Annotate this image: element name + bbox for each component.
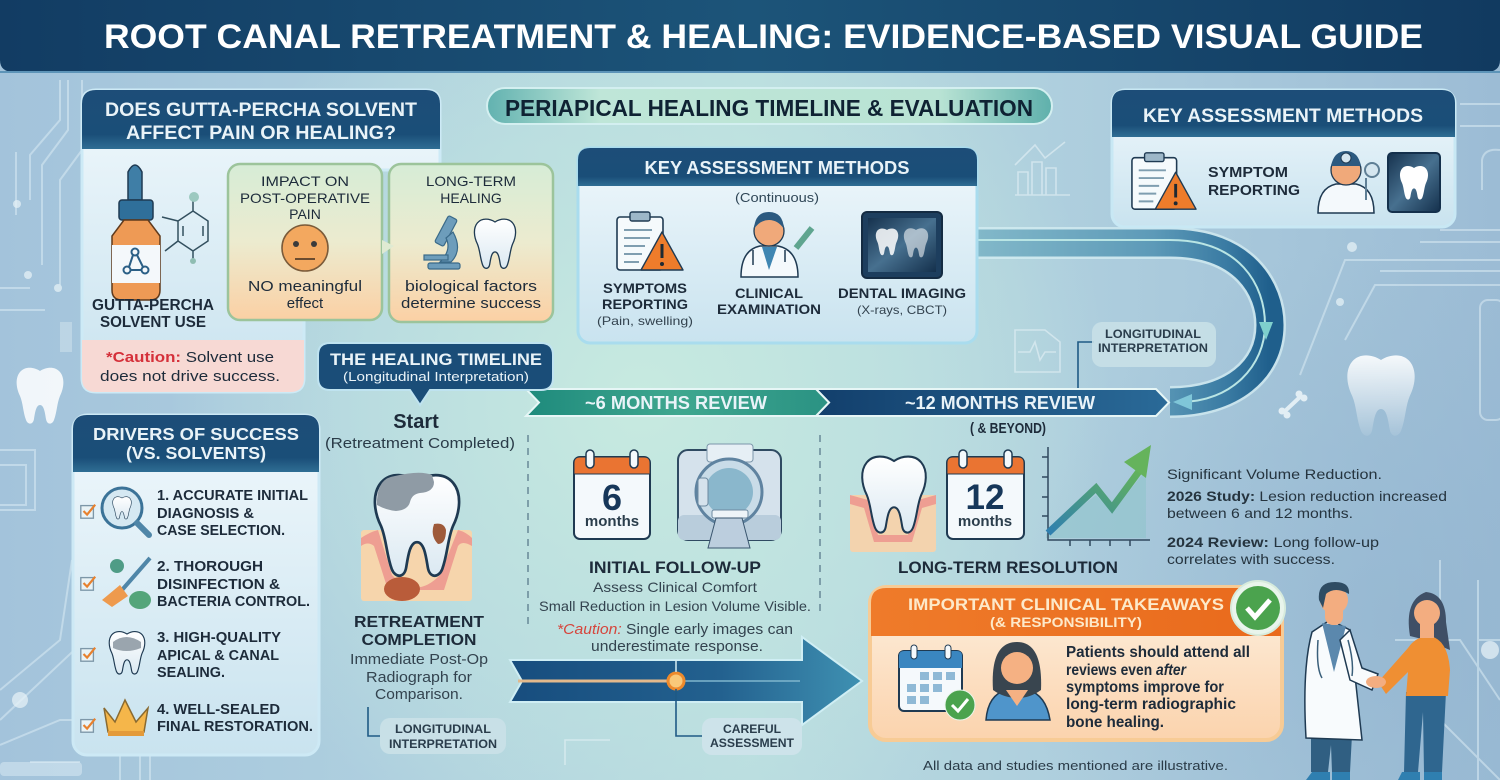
callout: the healing timeline — [318, 343, 553, 405]
text: initial follow-up: Assess Clinical Comfort — [593, 579, 757, 595]
note: illustrative data disclaimer: All data and studies mentioned are illustrative. — [923, 758, 1228, 773]
panel: key assessment methods (top right): REPORTING — [1208, 183, 1300, 199]
icon: 12 month calendar: 12 — [966, 478, 1004, 517]
text: long-term resolution: LONG-TERM RESOLUTION — [898, 559, 1118, 577]
panel heading: AFFECT PAIN OR HEALING? — [126, 123, 396, 144]
driver 4: final restoration: 4. WELL-SEALED — [157, 702, 280, 718]
icon: dentist — [1318, 151, 1379, 213]
patient figure — [1366, 592, 1450, 780]
labels: assessment methods: REPORTING — [602, 296, 688, 312]
label: solvent use — [92, 297, 214, 331]
icon: 6 month calendar: 6 — [602, 477, 622, 518]
panel: key assessment methods (continuous): (Continuous) — [735, 190, 819, 205]
icon: retreated tooth in gum — [361, 473, 472, 601]
title banner — [0, 0, 1500, 72]
card: post-operative pain impact: effect — [287, 295, 324, 312]
driver 1: diagnosis — [81, 488, 308, 539]
label: longitudinal interpretation (lower): INTERPRETATION — [389, 737, 497, 751]
icon: dental imaging — [862, 212, 942, 278]
icon: solvent bottle and molecule — [112, 165, 208, 300]
text: initial follow-up: Small Reduction in Lesion Volume Visible. — [539, 598, 811, 614]
driver 3: sealing — [81, 630, 281, 681]
panel heading — [105, 100, 417, 144]
label: solvent use: SOLVENT USE — [100, 314, 206, 331]
text: start: Start — [393, 411, 439, 433]
labels: assessment methods: SYMPTOMS — [603, 280, 687, 296]
card: long-term healing: LONG-TERM — [426, 173, 516, 189]
band: 6 months: ~6 MONTHS REVIEW — [585, 393, 767, 413]
labels: assessment methods: EXAMINATION — [717, 301, 821, 317]
heading: periapical timeline: PERIAPICAL HEALING TIMELINE & EVALUATION — [505, 95, 1033, 121]
driver 2: disinfection: 2. THOROUGH — [157, 559, 263, 575]
band: 12 months: ~12 MONTHS REVIEW — [905, 393, 1095, 413]
text: retreatment completion: Immediate Post-Op — [350, 652, 488, 668]
icon: CBCT scanner — [678, 444, 781, 548]
panel heading: (VS. SOLVENTS) — [126, 443, 266, 463]
text: retreatment completion: RETREATMENT — [354, 614, 485, 631]
driver 2: disinfection: DISINFECTION & — [157, 577, 281, 593]
driver 4: final restoration: FINAL RESTORATION. — [157, 719, 313, 735]
panel: key assessment methods (continuous): KEY ASSESSMENT METHODS — [644, 158, 910, 178]
labels: assessment methods: (X-rays, CBCT) — [857, 303, 947, 317]
panel heading: IMPORTANT CLINICAL TAKEAWAYS — [908, 595, 1224, 614]
text: initial follow-up: INITIAL FOLLOW-UP — [589, 559, 761, 577]
icon: healed tooth in gum — [850, 457, 936, 552]
driver 4: final restoration — [81, 700, 313, 736]
text: study evidence: Significant Volume Reduction. — [1167, 466, 1382, 482]
text: study evidence: correlates with success. — [1167, 551, 1335, 567]
card: post-operative pain impact: NO meaningful — [248, 278, 362, 295]
chart: lesion healing trend — [1042, 445, 1151, 546]
text: retreatment completion — [350, 614, 488, 703]
driver 1: diagnosis: CASE SELECTION. — [157, 523, 285, 539]
labels: assessment methods: CLINICAL — [735, 285, 803, 301]
panel: key assessment methods (top right): KEY ASSESSMENT METHODS — [1143, 105, 1423, 127]
takeaway text: reviews even after — [1066, 662, 1187, 679]
driver 3: sealing: 3. HIGH-QUALITY — [157, 630, 281, 646]
label: longitudinal interpretation (upper) — [1078, 322, 1216, 389]
card: long-term healing: determine success — [401, 295, 541, 312]
card: post-operative pain impact — [228, 164, 382, 320]
driver 1: diagnosis: 1. ACCURATE INITIAL — [157, 488, 308, 504]
driver 1: diagnosis: DIAGNOSIS & — [157, 506, 255, 522]
panel heading: DRIVERS OF SUCCESS — [93, 424, 299, 444]
icon: green check badge — [1231, 581, 1285, 635]
main forward arrow — [510, 637, 862, 725]
text: start: (Retreatment Completed) — [325, 435, 515, 452]
panel heading — [908, 595, 1224, 630]
labels: assessment methods — [597, 280, 966, 328]
panel: solvent question — [82, 90, 440, 392]
caution box: does not drive success. — [100, 368, 280, 385]
card: post-operative pain impact: IMPACT ON — [261, 173, 349, 189]
dentist figure — [1305, 582, 1378, 780]
label: longitudinal interpretation (upper): LONGITUDINAL — [1105, 329, 1201, 341]
panel heading: DOES GUTTA-PERCHA SOLVENT — [105, 100, 417, 121]
icon: clinician — [741, 212, 812, 277]
text: initial follow-up: underestimate response. — [591, 639, 763, 655]
card: post-operative pain impact: POST-OPERATIVE — [240, 190, 370, 206]
labels: assessment methods: DENTAL IMAGING — [838, 285, 966, 301]
band: 12 months — [816, 389, 1169, 416]
note: and beyond: ( & BEYOND) — [970, 420, 1046, 437]
icon: patient portrait — [986, 642, 1050, 720]
driver 3: sealing: SEALING. — [157, 665, 225, 681]
panel heading: (& RESPONSIBILITY) — [990, 615, 1142, 630]
caution box: *Caution: Solvent use — [106, 349, 274, 366]
label: careful assessment: CAREFUL — [723, 722, 781, 736]
caution box — [82, 340, 304, 392]
icon: microscope — [424, 215, 460, 269]
label: longitudinal interpretation (upper): INTERPRETATION — [1098, 343, 1208, 355]
label: longitudinal interpretation (lower) — [368, 707, 506, 754]
panel: drivers of success — [73, 415, 319, 755]
icon: tooth x-ray — [1388, 153, 1440, 212]
label: careful assessment — [676, 689, 802, 755]
panel: key assessment methods (top right) — [1112, 90, 1455, 227]
text: start — [325, 411, 515, 452]
text: initial follow-up — [539, 559, 811, 655]
marker: careful assessment node — [668, 673, 684, 689]
curved flow arrow — [978, 240, 1273, 410]
panel: key assessment methods (top right): SYMPTOM — [1208, 165, 1288, 181]
panel heading — [93, 424, 299, 463]
icon: 12 month calendar — [947, 450, 1024, 539]
icon: 6 month calendar: months — [585, 513, 639, 530]
takeaway text: symptoms improve for — [1066, 679, 1224, 696]
takeaway text: Patients should attend all — [1066, 644, 1250, 661]
title text: ROOT CANAL RETREATMENT & HEALING: EVIDENCE-BASED VISUAL GUIDE — [104, 18, 1423, 56]
callout: the healing timeline: THE HEALING TIMELINE — [330, 350, 542, 369]
driver 2: disinfection — [81, 558, 310, 610]
text: study evidence: 2024 Review: Long follow-up — [1167, 534, 1379, 550]
card: long-term healing: HEALING — [440, 190, 502, 206]
icon: symptom clipboard — [617, 212, 683, 270]
timeline band: 6 and 12 month reviews — [526, 389, 1169, 416]
panel: key assessment methods (continuous) — [578, 148, 977, 343]
takeaway text: bone healing. — [1066, 714, 1164, 731]
card: long-term healing: biological factors — [405, 278, 537, 295]
takeaway text: long-term radiographic — [1066, 696, 1236, 713]
card: long-term healing — [382, 164, 553, 322]
icon: clipboard warning — [1132, 153, 1196, 209]
driver 2: disinfection: BACTERIA CONTROL. — [157, 594, 310, 610]
icon: healthy tooth — [474, 219, 516, 268]
band: 6 months — [526, 389, 829, 416]
driver 3: sealing: APICAL & CANAL — [157, 648, 279, 664]
takeaway text — [1066, 644, 1250, 731]
label: solvent use: GUTTA-PERCHA — [92, 297, 214, 314]
heading: periapical timeline — [487, 88, 1052, 124]
text: initial follow-up: *Caution: Single early images can — [557, 622, 793, 638]
text: study evidence: between 6 and 12 months. — [1167, 505, 1353, 521]
labels: assessment methods: (Pain, swelling) — [597, 314, 693, 328]
illustration: dentist and patient handshake — [1305, 582, 1450, 780]
icon: 12 month calendar: months — [958, 513, 1012, 530]
label: careful assessment: ASSESSMENT — [710, 736, 795, 750]
text: study evidence: 2026 Study: Lesion reduction increased — [1167, 488, 1447, 504]
card: post-operative pain impact: PAIN — [289, 206, 321, 222]
icon: 6 month calendar — [574, 450, 650, 539]
panel: important clinical takeaways — [870, 581, 1285, 740]
icon: calendar with check — [899, 645, 975, 720]
text: study evidence — [1167, 466, 1447, 567]
text: retreatment completion: Radiograph for — [366, 670, 472, 686]
text: retreatment completion: COMPLETION — [362, 632, 476, 649]
callout: the healing timeline: (Longitudinal Interpretation) — [343, 370, 529, 384]
label: longitudinal interpretation (lower): LONGITUDINAL — [395, 722, 491, 736]
text: retreatment completion: Comparison. — [375, 687, 463, 703]
icon: neutral face — [282, 225, 328, 271]
